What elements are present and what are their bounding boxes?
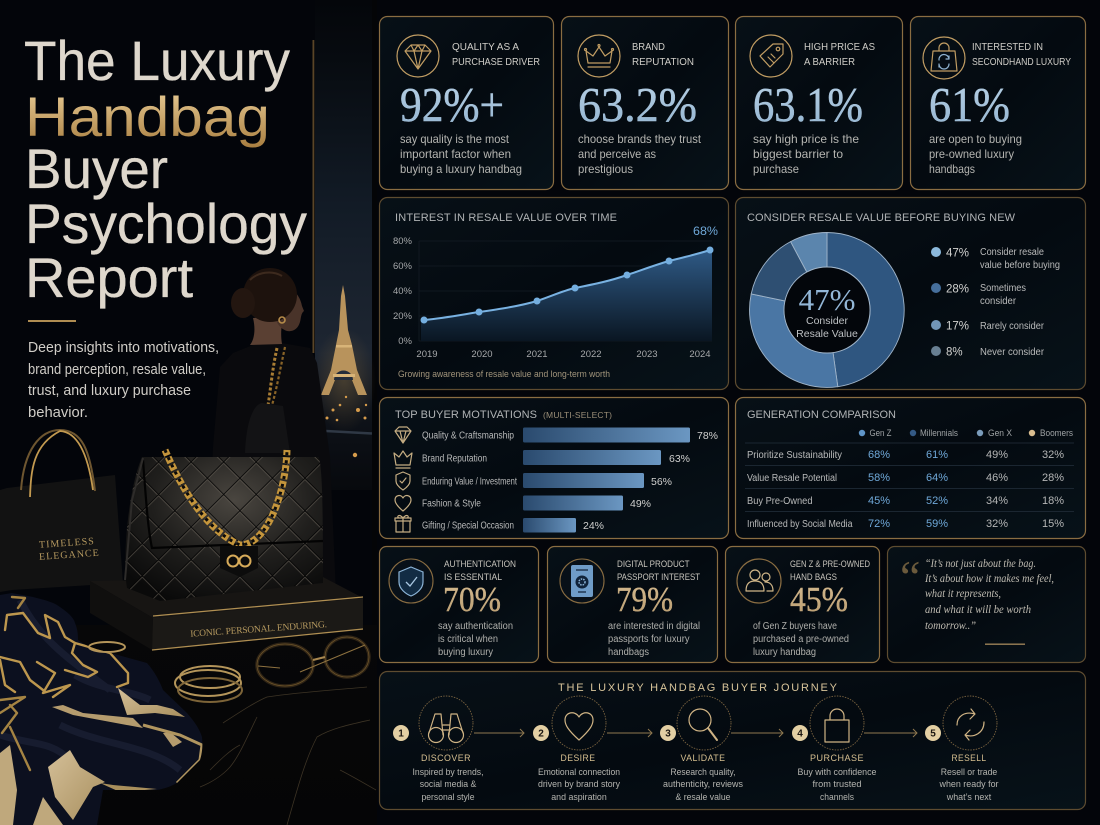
gift box pedestal — [90, 577, 363, 650]
stat heading: IS ESSENTIAL — [444, 572, 502, 583]
stat description: luxury handbag — [753, 647, 816, 658]
chart heading: INTEREST IN RESALE VALUE OVER TIME — [395, 212, 618, 224]
row icons — [394, 427, 412, 532]
comparison table: 15% — [1042, 518, 1064, 530]
bar chart: 24% — [583, 520, 604, 532]
donut legend: consider — [980, 296, 1017, 307]
line chart: 2023 — [636, 349, 658, 360]
step 5: resell: 5 — [930, 728, 936, 740]
comparison table: 32% — [986, 518, 1008, 530]
comparison table: 28% — [1042, 472, 1064, 484]
panel heading: GENERATION COMPARISON — [747, 409, 897, 421]
comparison table: 34% — [986, 495, 1008, 507]
comparison table: 68% — [868, 449, 890, 461]
subtitle: trust, and luxury purchase — [28, 383, 191, 399]
step 3: validate — [660, 696, 743, 803]
clasp — [220, 546, 258, 577]
subtitle: brand perception, resale value, — [28, 362, 206, 378]
stat description — [400, 132, 522, 176]
stat number: 45% — [790, 580, 848, 619]
stat description: passports for luxury — [608, 634, 690, 645]
comparison table — [745, 443, 1074, 530]
step 5: resell: Resell or trade — [941, 767, 997, 778]
line chart — [393, 226, 718, 360]
comparison table: 52% — [926, 495, 948, 507]
line chart: 2024 — [689, 349, 711, 360]
donut legend: Consider resale — [980, 247, 1044, 258]
panel: quality as a purchase driver — [380, 16, 554, 190]
line chart: 2021 — [526, 349, 548, 360]
stat heading — [632, 41, 694, 68]
panel heading: TOP BUYER MOTIVATIONS — [395, 409, 538, 421]
title: Handbag — [25, 85, 270, 148]
subtitle — [28, 340, 219, 421]
stat description: say high price is the — [753, 132, 859, 146]
comparison table: 64% — [926, 472, 948, 484]
icon: digital passport — [560, 559, 604, 603]
donut chart: 47% — [799, 282, 855, 317]
panel: consider resale value before buying new — [736, 198, 1086, 390]
quote text: what it represents, — [925, 586, 1001, 600]
step 2: desire: DESIRE — [560, 753, 596, 764]
stat number: 61% — [929, 77, 1010, 132]
step 3: validate: VALIDATE — [680, 753, 726, 764]
step 1: discover: social media & — [420, 779, 477, 790]
bar chart: Fashion & Style — [422, 498, 481, 510]
stat description: of Gen Z buyers have — [753, 621, 837, 632]
stat heading: HIGH PRICE AS — [804, 41, 875, 53]
stat description — [753, 621, 849, 658]
step 3: validate: 3 — [665, 728, 671, 740]
step 1: discover: 1 — [398, 728, 404, 740]
donut chart: Consider — [806, 315, 849, 327]
chart note: Growing awareness of resale value and long-term worth — [398, 369, 610, 380]
step 4: purchase: Buy with confidence — [798, 767, 876, 778]
bar chart: 56% — [651, 476, 672, 488]
woman from behind — [205, 268, 338, 640]
donut legend: 47% — [946, 248, 969, 260]
step 1: discover: DISCOVER — [421, 753, 471, 764]
shopping bag: TIMELESS — [39, 536, 95, 551]
donut chart — [750, 232, 904, 387]
bar chart: 63% — [669, 453, 690, 465]
quilted black handbag — [125, 450, 323, 601]
stat heading: DIGITAL PRODUCT — [617, 559, 690, 570]
stat heading — [804, 41, 875, 68]
stat number: 92%+ — [400, 77, 504, 132]
icon: shield — [389, 559, 433, 603]
stat heading: HAND BAGS — [790, 572, 837, 583]
stat description: are interested in digital — [608, 621, 700, 632]
stat description: buying luxury — [438, 647, 493, 658]
stat heading: PURCHASE DRIVER — [452, 56, 540, 68]
donut legend: 8% — [946, 346, 963, 358]
bar chart: 78% — [697, 430, 718, 442]
comparison table: 49% — [986, 449, 1008, 461]
stat heading: GEN Z & PRE-OWNED — [790, 559, 870, 570]
step 2: desire: driven by brand story — [538, 779, 620, 790]
stat description — [438, 621, 513, 658]
stat number: 70% — [443, 580, 501, 619]
icon: diamond — [397, 35, 439, 77]
arrow — [864, 729, 917, 737]
panel: interest in resale value over time — [380, 198, 728, 390]
journey heading: THE LUXURY HANDBAG BUYER JOURNEY — [558, 682, 839, 694]
stat heading — [452, 41, 540, 68]
donut legend: value before buying — [980, 260, 1060, 271]
step 4: purchase: PURCHASE — [810, 753, 864, 764]
subtitle: behavior. — [28, 405, 88, 421]
donut legend: Never consider — [980, 347, 1045, 358]
panel: authentication is essential — [380, 546, 538, 662]
arrow — [474, 729, 524, 737]
comparison table: 46% — [986, 472, 1008, 484]
step 4: purchase: from trusted — [812, 779, 862, 790]
stat description: purchase — [753, 162, 799, 176]
panel: brand reputation — [562, 16, 728, 190]
stat description — [929, 132, 1022, 176]
bar chart: Enduring Value / Investment — [422, 476, 517, 488]
line chart: 2022 — [580, 349, 602, 360]
donut legend — [931, 247, 1060, 358]
step 2: desire — [533, 696, 620, 803]
comparison table: 45% — [868, 495, 890, 507]
window with night sky — [315, 0, 372, 490]
stat heading: REPUTATION — [632, 56, 694, 68]
panel: digital product passport interest — [548, 546, 718, 662]
stat description: is critical when — [438, 634, 498, 645]
stat number: 63.2% — [578, 77, 697, 132]
shopping bag: ELEGANCE — [39, 548, 100, 563]
stat description — [578, 132, 702, 176]
arrow — [731, 729, 783, 737]
comparison table: Buy Pre-Owned — [747, 496, 812, 507]
panel: buyer journey — [380, 672, 1086, 810]
generation legend — [859, 428, 1073, 438]
stat number: 79% — [616, 580, 673, 619]
step 1: discover — [393, 696, 484, 803]
comparison table: 61% — [926, 449, 948, 461]
panel: gen z and pre-owned handbags — [726, 546, 880, 662]
step 3: validate: & resale value — [676, 792, 730, 803]
step 3: validate: Research quality, — [670, 767, 736, 778]
icon: Eiffel tower — [321, 285, 367, 395]
comparison table: 18% — [1042, 495, 1064, 507]
stat heading: PASSPORT INTEREST — [617, 572, 700, 583]
line chart: 20% — [393, 311, 413, 322]
quote text: and what it will be worth — [925, 602, 1031, 616]
generation legend: Boomers — [1040, 428, 1073, 438]
step 2: desire: 2 — [538, 728, 544, 740]
quote text: “It’s not just about the bag. — [925, 556, 1036, 570]
gift box pedestal: ICONIC. PERSONAL. ENDURING. — [190, 620, 327, 640]
line chart: 80% — [393, 236, 413, 247]
bar chart — [422, 428, 718, 532]
comparison table: 58% — [868, 472, 890, 484]
stat heading — [617, 559, 700, 583]
stat description: important factor when — [400, 147, 511, 161]
line chart: 40% — [393, 286, 413, 297]
step 4: purchase — [792, 696, 876, 803]
stat description: handbags — [608, 647, 649, 658]
title: The Luxury — [24, 29, 290, 92]
stat description — [753, 132, 859, 176]
title: Report — [25, 246, 193, 309]
shopping bag — [0, 430, 123, 592]
arrow — [607, 729, 652, 737]
donut legend: Sometimes — [980, 283, 1026, 294]
bar chart: 49% — [630, 498, 651, 510]
step 1: discover: Inspired by trends, — [412, 767, 484, 778]
stat heading: SECONDHAND LUXURY — [972, 56, 1071, 68]
generation legend: Gen X — [988, 428, 1012, 438]
bar chart: Gifting / Special Occasion — [422, 520, 514, 532]
stat description — [608, 621, 700, 658]
title — [24, 29, 307, 309]
stat heading: BRAND — [632, 41, 665, 53]
line chart: 68% — [693, 226, 718, 238]
stat description: handbags — [929, 162, 975, 176]
comparison table: 32% — [1042, 449, 1064, 461]
gold bracelets and ring — [89, 642, 242, 702]
comparison table: Value Resale Potential — [747, 473, 837, 484]
stat heading — [444, 559, 516, 583]
sunglasses — [257, 637, 369, 686]
quote text: It’s about how it makes me feel, — [924, 571, 1054, 585]
icon: people — [737, 559, 781, 603]
stat description: pre-owned luxury — [929, 147, 1014, 161]
panel heading — [395, 409, 612, 421]
donut chart: Resale Value — [796, 328, 858, 340]
stat description: purchased a pre-owned — [753, 634, 849, 645]
stat heading: A BARRIER — [804, 56, 855, 68]
stat number: 63.1% — [753, 77, 863, 132]
step 1: discover: personal style — [422, 792, 474, 803]
step 4: purchase: 4 — [797, 728, 803, 740]
step 5: resell: RESELL — [952, 753, 986, 764]
panel: top buyer motivations — [380, 398, 728, 538]
quote text: tomorrow..” — [925, 618, 976, 632]
title: Buyer — [25, 137, 168, 200]
panel: generation comparison — [736, 398, 1086, 538]
step 4: purchase: channels — [820, 792, 854, 803]
line chart: 60% — [393, 261, 413, 272]
line chart: 2019 — [416, 349, 438, 360]
donut legend: 28% — [946, 284, 969, 296]
line chart: 0% — [398, 336, 413, 347]
stat heading: INTERESTED IN — [972, 41, 1043, 53]
comparison table: Prioritize Sustainability — [747, 450, 842, 461]
icon: crown — [578, 35, 620, 77]
gold rule under title — [28, 320, 76, 322]
generation legend: Millennials — [920, 428, 958, 438]
generation legend: Gen Z — [870, 428, 892, 438]
panel: high price as a barrier — [736, 16, 902, 190]
panel heading: (MULTI-SELECT) — [543, 410, 612, 420]
quote text — [924, 556, 1054, 632]
panel: customer quote — [888, 546, 1086, 662]
panel: interested in secondhand luxury — [910, 16, 1086, 190]
donut legend: 17% — [946, 320, 969, 332]
step 2: desire: and aspiration — [551, 792, 607, 803]
icon: price tag — [750, 35, 792, 77]
stat heading: QUALITY AS A — [452, 41, 519, 53]
chain strap — [165, 450, 287, 545]
icon: bag with circular arrows — [923, 37, 965, 79]
comparison table: 72% — [868, 518, 890, 530]
line chart: 2020 — [471, 349, 493, 360]
bar chart: Quality & Craftsmanship — [422, 430, 514, 442]
step 5: resell: when ready for — [939, 779, 998, 790]
step 3: validate: authenticity, reviews — [663, 779, 743, 790]
stat heading — [972, 41, 1071, 68]
stat heading — [790, 559, 870, 583]
silk scarf — [0, 590, 205, 825]
stat description: and perceive as — [578, 147, 656, 161]
quote mark: “ — [900, 551, 920, 602]
donut legend: Rarely consider — [980, 321, 1045, 332]
title: Psychology — [25, 192, 307, 255]
chart heading: CONSIDER RESALE VALUE BEFORE BUYING NEW — [747, 212, 1016, 224]
bar chart: Brand Reputation — [422, 454, 487, 464]
photo: Paris window scene with luxury handbag still life — [0, 0, 377, 825]
step 5: resell — [925, 696, 998, 803]
step 5: resell: what’s next — [946, 792, 992, 803]
stat description: biggest barrier to — [753, 147, 843, 161]
comparison table: Influenced by Social Media — [747, 519, 853, 530]
step 2: desire: Emotional connection — [538, 767, 620, 778]
stat description: choose brands they trust — [578, 132, 702, 146]
comparison table: 59% — [926, 518, 948, 530]
stat description: say authentication — [438, 621, 513, 632]
stat description: are open to buying — [929, 132, 1022, 146]
stat description: buying a luxury handbag — [400, 162, 522, 176]
stat description: say quality is the most — [400, 132, 510, 146]
marble floor — [0, 625, 377, 825]
stat heading: AUTHENTICATION — [444, 559, 516, 570]
stat description: prestigious — [578, 162, 633, 176]
subtitle: Deep insights into motivations, — [28, 340, 219, 356]
